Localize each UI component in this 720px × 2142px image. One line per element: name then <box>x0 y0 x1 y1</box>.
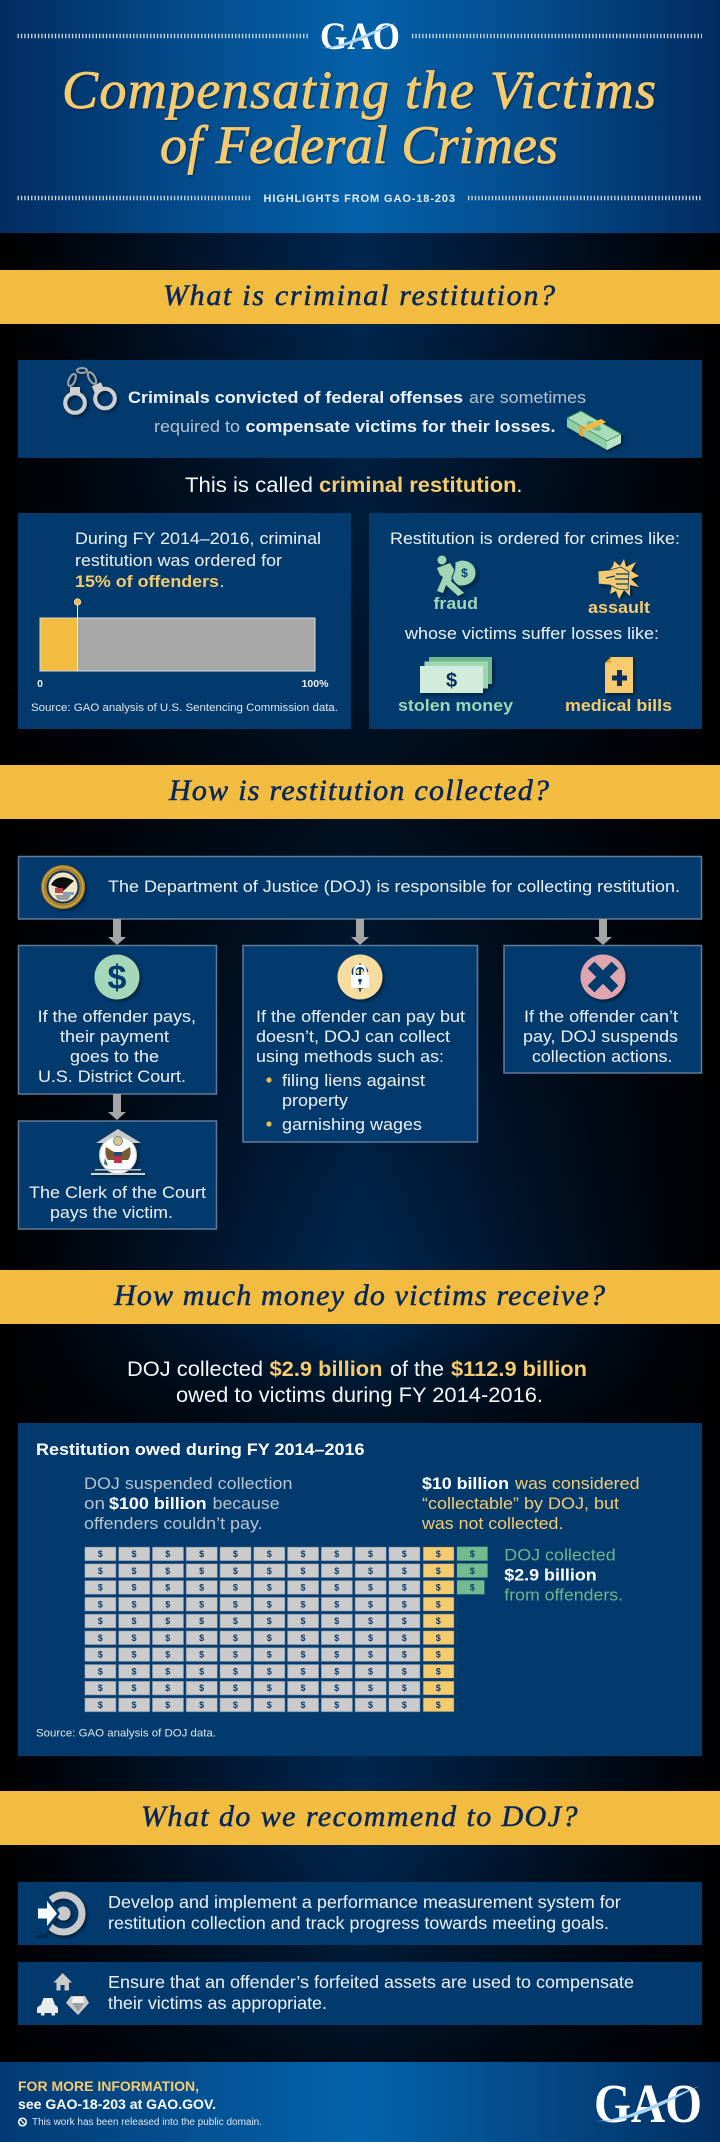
panel: offender cannot pay: If the offender can’t <box>524 1007 678 1026</box>
arrow: to clerk box <box>108 1094 126 1120</box>
statement: this is called criminal restitution: . <box>516 474 522 497</box>
callout: collectable <box>421 1474 640 1533</box>
main title <box>62 60 656 175</box>
statement: DOJ collected: DOJ collected <box>127 1358 263 1381</box>
icon: lock and dollar <box>338 954 382 1000</box>
label: stolen money: stolen money <box>398 696 514 715</box>
waffle chart: dollars: $$$$$$$$$$$ <box>98 1599 441 1609</box>
panel: offender can pay but does not: If the offender can pay but <box>256 1007 465 1026</box>
section heading: how much money do victims receive: How much money do victims receive? <box>113 1279 606 1312</box>
panel text: restitution was ordered for <box>75 551 282 570</box>
statement: DOJ collected: of the <box>390 1358 444 1381</box>
footer text <box>18 2079 262 2128</box>
subtitle: HIGHLIGHTS FROM GAO-18-203 <box>264 193 455 205</box>
bar chart: 15 percent: 0 <box>37 678 43 690</box>
statement: DOJ collected: $112.9 billion <box>451 1358 587 1381</box>
icon: diamond <box>66 1996 89 2015</box>
waffle chart: dollars: $$$$$$$$$$$ <box>98 1700 441 1710</box>
arrow: to can pay box <box>351 919 369 945</box>
panel: recommendation 2: their victims as appropriate. <box>108 1993 327 2013</box>
footer <box>0 2062 720 2142</box>
waffle chart: dollars <box>84 1547 488 1714</box>
icon: handcuffs <box>65 368 115 413</box>
icon: car <box>37 1998 58 2016</box>
panel: offender cannot pay: pay, DOJ suspends <box>523 1027 678 1046</box>
icon: lock and dollar: $ <box>351 959 370 997</box>
waffle chart: dollars: $$$$$$$$$$$$ <box>98 1549 475 1559</box>
panel heading: Restitution owed during FY 2014–2016 <box>36 1440 364 1459</box>
label: fraud: fraud <box>434 594 478 613</box>
statement: DOJ collected: owed to victims during FY 2014-2016. <box>176 1384 543 1407</box>
panel text: . <box>220 572 224 591</box>
definition text: compensate victims for their losses. <box>246 417 556 436</box>
panel: offender cannot pay <box>504 946 702 1073</box>
panel: offender can pay but does not: using methods such as: <box>256 1047 444 1066</box>
section heading: what do we recommend: What do we recommend to DOJ? <box>141 1800 578 1833</box>
callout: collected: from offenders. <box>504 1586 623 1605</box>
statement: this is called criminal restitution <box>185 474 522 497</box>
section heading: how is restitution collected <box>0 765 720 819</box>
waffle chart: dollars: $$$$$$$$$$$ <box>98 1666 441 1676</box>
arrow: to payment box <box>108 919 126 945</box>
footer text: This work has been released into the public domain. <box>32 2117 262 2128</box>
GAO logo bottom: GAO <box>594 2073 702 2134</box>
GAO logo top: GAO <box>320 15 400 58</box>
icon: dollar circle <box>94 954 140 1000</box>
waffle chart: dollars: $$$$$$$$$$$ <box>98 1633 441 1643</box>
waffle chart: dollars: $$$$$$$$$$$ <box>98 1683 441 1693</box>
panel: offender pays: U.S. District Court. <box>38 1067 186 1086</box>
icon: fraud: $ <box>461 566 468 580</box>
source note: Source: GAO analysis of DOJ data. <box>36 1728 216 1740</box>
panel: restitution owed <box>18 1423 702 1756</box>
bullet list: filing liens against <box>282 1071 425 1090</box>
callout: collectable: was not collected. <box>421 1514 563 1533</box>
source note: Source: GAO analysis of U.S. Sentencing Commission data. <box>31 702 338 714</box>
definition text: are sometimes <box>469 388 586 407</box>
panel text <box>75 529 321 591</box>
icon: assault fist <box>598 559 639 599</box>
panel: recommendation 1 <box>18 1882 702 1945</box>
statement: this is called criminal restitution: criminal restitution <box>319 474 516 497</box>
panel: recommendation 1: restitution collection and track progress towards meeting goals. <box>108 1913 609 1933</box>
bullet list <box>266 1071 425 1134</box>
callout: collected: DOJ collected <box>504 1546 616 1565</box>
callout: suspended collection: because <box>213 1494 280 1513</box>
panel: crimes and losses <box>369 513 702 729</box>
panel: offender pays <box>18 946 216 1094</box>
callout: collectable: $10 billion <box>422 1474 509 1493</box>
section heading: what do we recommend <box>0 1791 720 1845</box>
icon: fraud <box>437 556 476 596</box>
header banner <box>0 0 720 233</box>
panel text: During FY 2014–2016, criminal <box>75 529 321 548</box>
section heading: how is restitution collected: How is restitution collected? <box>168 774 550 807</box>
waffle chart: dollars: $$$$$$$$$$$$ <box>98 1566 475 1576</box>
panel: recommendation 2: Ensure that an offender’s forfeited assets are used to compensate <box>108 1972 634 1992</box>
panel: offender pays: If the offender pays, <box>38 1007 196 1026</box>
panel: clerk of the court: The Clerk of the Court <box>29 1183 206 1202</box>
icon: target with arrow <box>35 1892 82 1935</box>
panel text: 15% of offenders <box>75 572 219 591</box>
panel: share of offenders <box>18 513 351 729</box>
bullet list: property <box>282 1091 349 1110</box>
panel: clerk of the court <box>18 1121 216 1229</box>
icon: house <box>54 1973 72 1990</box>
waffle chart: dollars: $$$$$$$$$$$ <box>98 1616 441 1626</box>
icon: dollar circle: $ <box>108 959 127 997</box>
panel: recommendation 1: Develop and implement a performance measurement system for <box>108 1892 621 1912</box>
icon: x circle <box>580 954 626 1000</box>
panel: offender cannot pay: collection actions. <box>532 1047 672 1066</box>
callout: suspended collection <box>84 1474 292 1533</box>
definition text <box>128 388 586 436</box>
section heading: how much money do victims receive <box>0 1270 720 1324</box>
icon: court seal <box>91 1129 145 1175</box>
bar chart: 15 percent <box>37 599 329 690</box>
callout: collected: $2.9 billion <box>504 1566 597 1585</box>
panel: crimes and losses: Restitution is ordered for crimes like: <box>390 529 680 548</box>
arrow: to cannot pay box <box>594 919 612 945</box>
label: medical bills: medical bills <box>565 696 672 715</box>
definition text: required to <box>154 417 240 436</box>
section heading: what is criminal restitution <box>0 270 720 324</box>
panel: DOJ responsibility <box>18 856 702 919</box>
panel: DOJ responsibility: The Department of Justice (DOJ) is responsible for collecting restitution. <box>108 877 680 896</box>
definition text: Criminals convicted of federal offenses <box>128 388 463 407</box>
callout: suspended collection: on <box>84 1494 105 1513</box>
callout: suspended collection: DOJ suspended collection <box>84 1474 292 1493</box>
panel: offender pays: their payment <box>60 1027 169 1046</box>
callout: suspended collection: offenders couldn’t pay. <box>84 1514 263 1533</box>
section heading: what is criminal restitution: What is criminal restitution? <box>163 279 556 312</box>
footer text: FOR MORE INFORMATION, <box>18 2079 199 2094</box>
icon: DOJ seal <box>41 865 85 909</box>
label: assault: assault <box>588 598 650 617</box>
icon: medical bills <box>605 657 633 693</box>
panel: crimes and losses: whose victims suffer losses like: <box>404 624 659 643</box>
bar chart: 15 percent: 100% <box>302 678 329 690</box>
waffle chart: dollars: $$$$$$$$$$$ <box>98 1650 441 1660</box>
statement: this is called criminal restitution: This is called <box>185 474 313 497</box>
panel: clerk of the court: pays the victim. <box>50 1203 173 1222</box>
panel: definition <box>18 360 702 458</box>
waffle chart: dollars: $$$$$$$$$$$$ <box>98 1583 475 1593</box>
icon: stolen money: $ <box>446 670 457 692</box>
footer text: see GAO-18-203 at GAO.GOV. <box>18 2097 216 2112</box>
panel: offender can pay but does not: doesn’t, DOJ can collect <box>256 1027 450 1046</box>
callout: collected <box>504 1546 623 1605</box>
panel: offender can pay but does not <box>243 946 478 1142</box>
icon: stolen money <box>420 657 492 693</box>
callout: suspended collection: $100 billion <box>109 1494 207 1513</box>
statement: DOJ collected: $2.9 billion <box>270 1358 382 1381</box>
main title: Compensating the Victims <box>62 60 656 120</box>
panel: offender pays: goes to the <box>70 1047 159 1066</box>
icon: money stack <box>567 411 621 450</box>
callout: collectable: was considered <box>514 1474 640 1493</box>
bullet list: garnishing wages <box>282 1115 422 1134</box>
statement: DOJ collected <box>127 1358 587 1407</box>
callout: collectable: “collectable” by DOJ, but <box>422 1494 619 1513</box>
main title: of Federal Crimes <box>160 115 558 175</box>
panel: recommendation 2 <box>18 1962 702 2025</box>
